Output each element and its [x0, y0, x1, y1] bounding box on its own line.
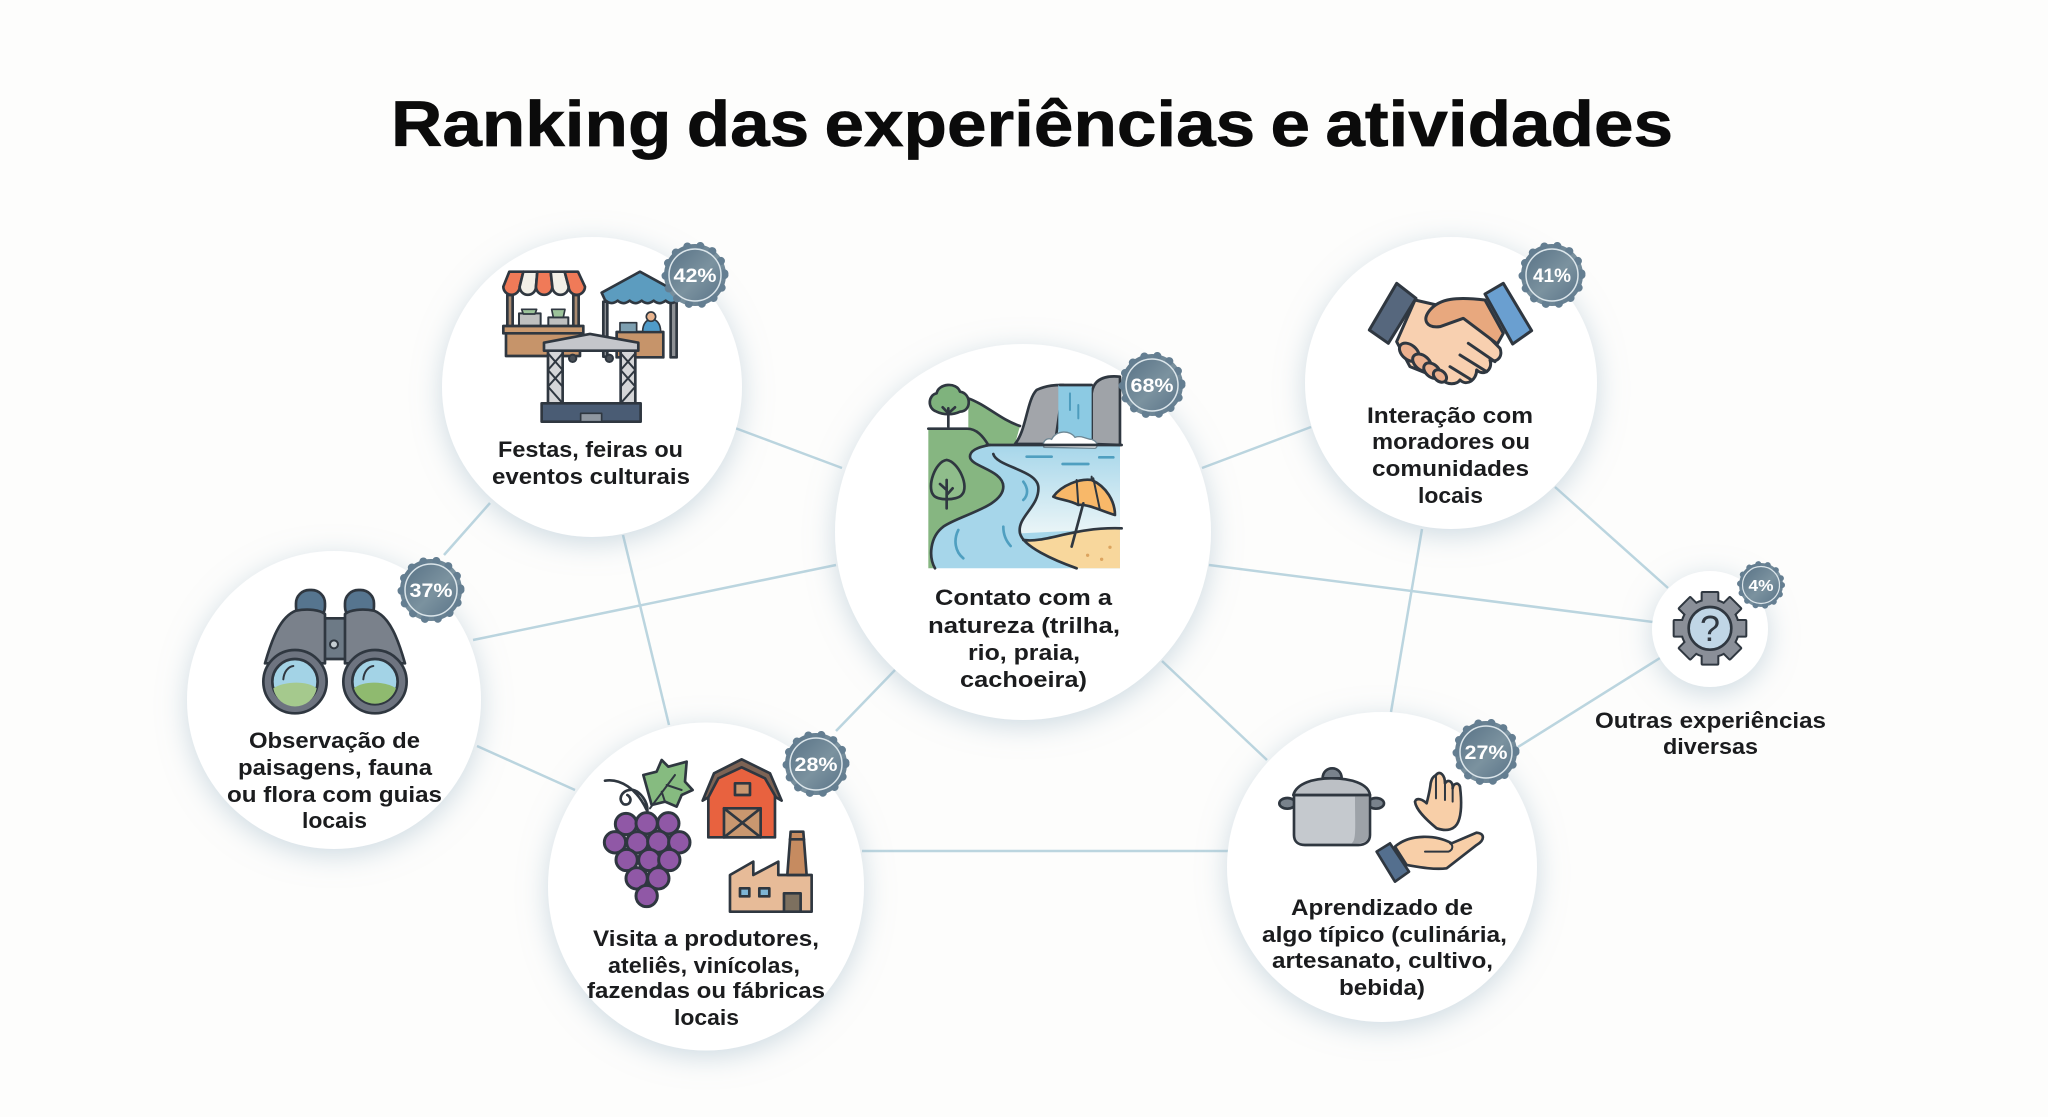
label: bebida) — [1339, 975, 1425, 1000]
label: moradores ou — [1372, 429, 1530, 454]
icon: handshake — [1369, 283, 1532, 385]
icon: river landscape — [928, 376, 1122, 568]
label: fazendas ou fábricas — [587, 978, 825, 1003]
label — [587, 926, 825, 1030]
badge: 28%: 28% — [794, 755, 838, 776]
title: Ranking das experiências e atividades — [391, 88, 1673, 160]
badge: 4% — [1739, 563, 1783, 607]
label: natureza (trilha, — [928, 613, 1120, 638]
icon: binoculars — [263, 590, 407, 713]
badge: 37% — [400, 559, 462, 621]
badge: 68%: 68% — [1130, 376, 1174, 397]
label: Festas, feiras ou — [498, 437, 683, 462]
label — [1262, 895, 1507, 1000]
label: diversas — [1663, 734, 1758, 759]
label: cachoeira) — [960, 667, 1087, 692]
label: locais — [674, 1005, 739, 1030]
panel: Outras experiências diversas — [1595, 563, 1826, 759]
panel: Interação com moradores ou comunidades locais — [1305, 237, 1597, 529]
label: ou flora com guias — [227, 782, 442, 807]
badge: 27% — [1455, 721, 1517, 783]
label — [1367, 403, 1533, 508]
badge: 27%: 27% — [1464, 743, 1508, 764]
label: artesanato, cultivo, — [1272, 948, 1493, 973]
badge: 37%: 37% — [410, 581, 453, 602]
label: ateliês, vinícolas, — [608, 953, 800, 978]
panel: Aprendizado — [1227, 712, 1537, 1022]
label: locais — [1418, 483, 1483, 508]
label — [1595, 708, 1826, 759]
icon: gear with question mark: ? — [1700, 608, 1720, 649]
badge: 42%: 42% — [674, 266, 717, 287]
panel: Visita a produtores — [548, 722, 864, 1050]
connection lines — [444, 427, 1668, 851]
badge: 4%: 4% — [1748, 578, 1773, 595]
label: Observação de — [249, 728, 420, 753]
label: Interação com — [1367, 403, 1533, 428]
badge: 42% — [664, 244, 726, 306]
badge: 41% — [1521, 244, 1583, 306]
label: Visita a produtores, — [593, 926, 819, 951]
panel: Festas, feiras ou eventos culturais — [442, 237, 742, 537]
label: Contato com a — [935, 585, 1113, 610]
label: algo típico (culinária, — [1262, 922, 1507, 947]
badge: 28% — [785, 733, 847, 795]
badge: 68% — [1121, 354, 1183, 416]
label: Aprendizado de — [1291, 895, 1473, 920]
icon: grapes, barn and factory — [604, 759, 812, 912]
badge: 41%: 41% — [1533, 266, 1571, 287]
label — [227, 728, 442, 833]
label — [928, 585, 1120, 692]
label: Outras experiências — [1595, 708, 1826, 733]
label — [492, 437, 690, 489]
icon: cooking pot and hands — [1279, 768, 1483, 882]
icon: gear with question mark — [1675, 593, 1745, 664]
label: comunidades — [1372, 456, 1529, 481]
label: locais — [302, 808, 367, 833]
label: eventos culturais — [492, 464, 690, 489]
label: paisagens, fauna — [238, 755, 433, 780]
panel: Contato com a natureza — [835, 344, 1211, 720]
icon: market stalls and stage — [503, 272, 678, 422]
label: rio, praia, — [968, 640, 1080, 665]
panel: Observação de paisagens — [187, 551, 481, 849]
